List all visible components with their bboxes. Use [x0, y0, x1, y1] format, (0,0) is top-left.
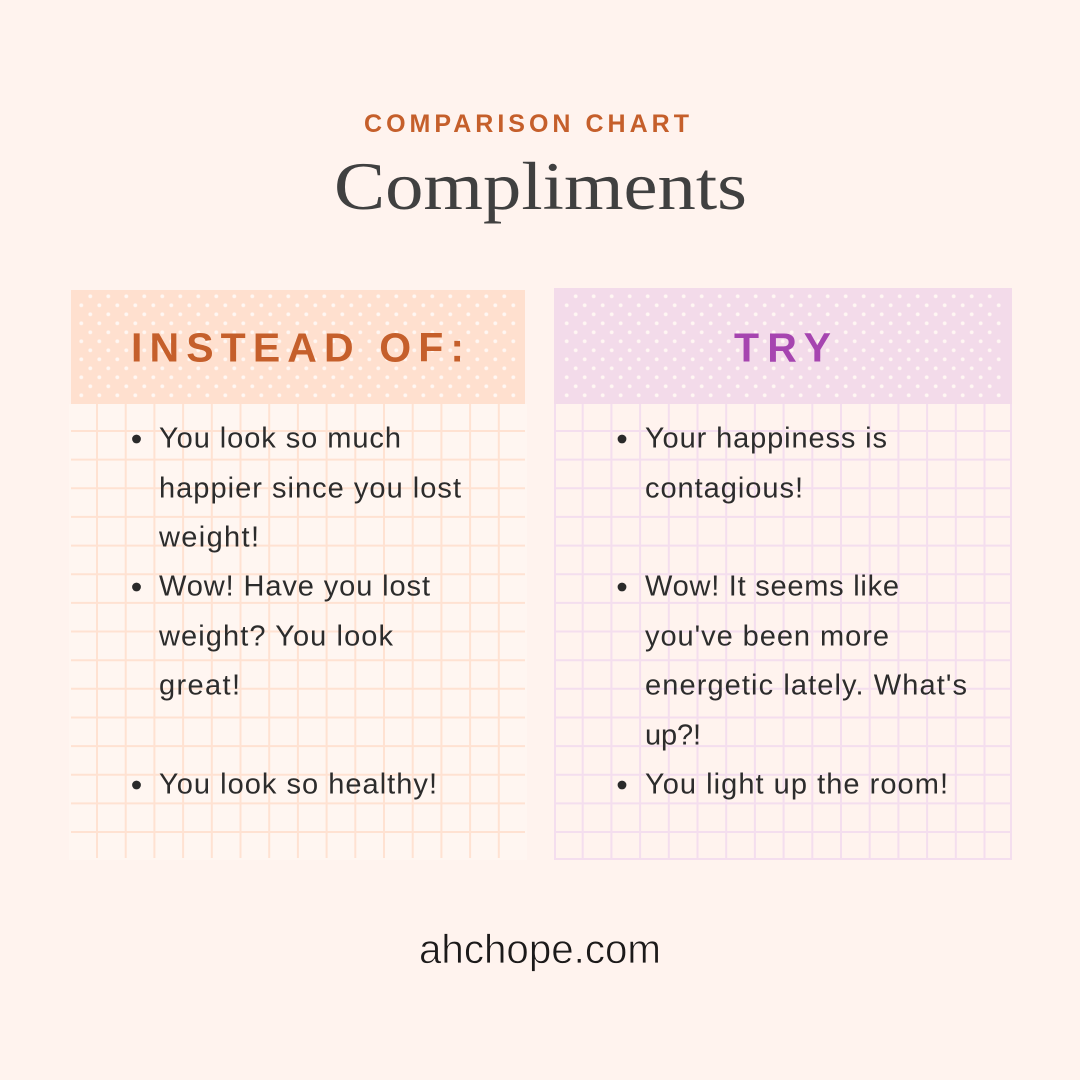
list: try: You light up the room! [645, 769, 948, 801]
list: instead of: great! [159, 670, 240, 702]
list: instead of: happier since you lost [159, 473, 461, 505]
list: try: you've been more [645, 621, 889, 653]
list: try: Your happiness is [645, 423, 887, 455]
list: instead of: Wow! Have you lost [159, 571, 430, 603]
grid: try [554, 404, 1012, 859]
list: try: contagious! [645, 473, 803, 505]
list: try: energetic lately. What's [645, 670, 967, 702]
list: try [618, 423, 967, 801]
header: instead of [71, 290, 525, 404]
list: try: up?! [645, 720, 701, 752]
list: instead of: weight? You look [158, 621, 394, 653]
header: try: TRY [734, 324, 831, 370]
list: instead of: You look so healthy! [159, 769, 437, 801]
title: Compliments [334, 148, 747, 224]
list: try: Wow! It seems like [645, 571, 899, 603]
list: instead of: You look so much [159, 423, 401, 455]
eyebrow heading: COMPARISON CHART [364, 110, 689, 138]
header: instead of: INSTEAD OF: [131, 324, 464, 370]
panel: try [554, 288, 1012, 859]
grid: instead of [71, 404, 525, 858]
header: try [554, 288, 1012, 404]
list: instead of [132, 423, 461, 801]
panel: instead of [69, 290, 527, 860]
list: instead of: weight! [158, 522, 259, 554]
footer website: ahchope.com [419, 926, 661, 972]
